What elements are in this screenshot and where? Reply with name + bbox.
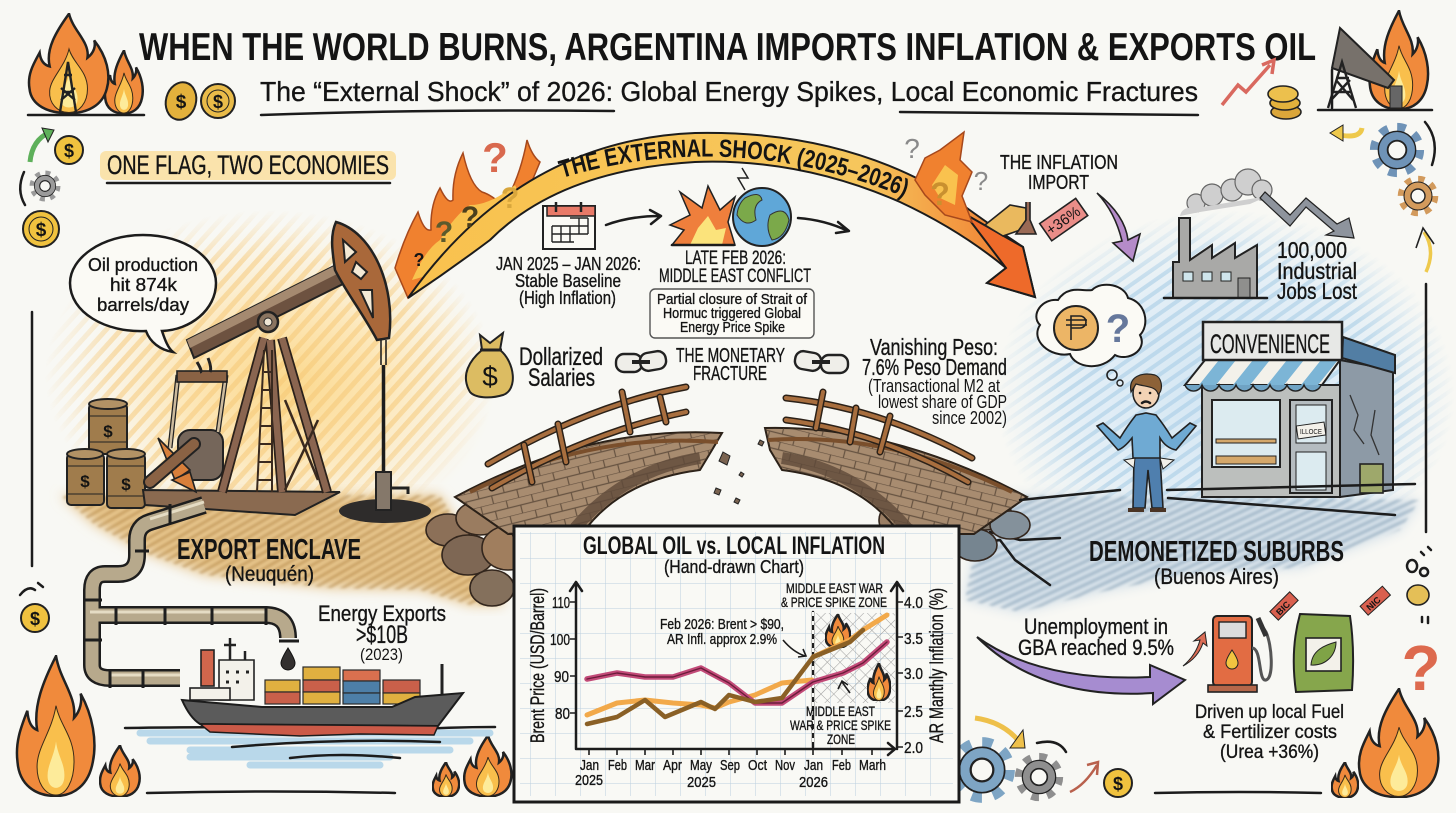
bridge left railing	[488, 387, 686, 488]
callout: strait of hormuz: Energy Price Spike	[680, 320, 785, 336]
chart right tick labels: 4.0	[904, 595, 923, 612]
pump base	[143, 490, 340, 515]
text: stable baseline: JAN 2025 – JAN 2026:	[496, 254, 641, 274]
text: vanishing peso	[862, 334, 1007, 428]
thought bubble: peso coin	[1036, 285, 1145, 386]
text: the monetary fracture: FRACTURE	[693, 363, 767, 385]
speech bubble: oil production: barrels/day	[97, 295, 189, 315]
banner flames right	[915, 132, 972, 222]
ground: cracked suburbs	[965, 495, 1420, 612]
bridge right railing	[786, 392, 972, 482]
chart title: GLOBAL OIL vs. LOCAL INFLATION	[583, 532, 885, 560]
chart month labels: Marh	[859, 758, 886, 774]
chart annotation: war zone lower: ZONE	[827, 731, 855, 747]
arrow: calendar to explosion	[606, 210, 661, 225]
chart month labels: Jan	[580, 758, 599, 774]
chart annotation: february 2026: AR Infl. approx 2.9%	[667, 632, 777, 648]
arc banner: the external shock: ?	[930, 176, 950, 212]
store sign	[1203, 322, 1342, 360]
pump wellhead	[376, 472, 391, 510]
chart right tick labels: 2.5	[904, 704, 923, 721]
subtitle: The “External Shock” of 2026: Global Energy Spikes, Local Economic Fractures	[260, 76, 1198, 107]
text: fuel and fertilizer costs	[1195, 702, 1344, 763]
stat: energy exports: Energy Exports	[318, 601, 446, 626]
stat: industrial jobs lost: Industrial	[1277, 258, 1357, 284]
thought bubble: peso coin: ?	[1106, 307, 1130, 351]
chart axes	[570, 582, 903, 755]
heading: demonetized suburbs: (Buenos Aires)	[1154, 564, 1279, 589]
icon: broken chain left	[616, 350, 667, 372]
text: middle east conflict: MIDDLE EAST CONFLICT	[659, 266, 811, 287]
arc banner: the external shock: ?	[414, 250, 424, 270]
text: the inflation import: THE INFLATION	[1000, 152, 1118, 174]
person with empty pockets	[1097, 374, 1196, 510]
icon: fuel pump: BIC	[1274, 599, 1292, 617]
text: vanishing peso: lowest share of GDP	[878, 392, 1007, 412]
chart month labels: 2026	[799, 775, 828, 791]
text: fuel and fertilizer costs: & Fertilizer costs	[1203, 722, 1337, 743]
text: dollarized salaries	[519, 343, 603, 392]
arrow: small red rising	[1183, 632, 1207, 666]
icon: flames, bottom right	[1155, 689, 1438, 798]
question marks around banner: ?	[482, 134, 508, 181]
icon: broken chain right	[794, 350, 848, 373]
chart panel: global oil vs local inflation	[514, 526, 959, 802]
factory smoke	[1187, 169, 1272, 212]
store window	[1212, 400, 1280, 467]
stat: unemployment: Unemployment in	[1024, 614, 1168, 639]
stat: unemployment: GBA reached 9.5%	[1018, 635, 1174, 660]
text: fuel and fertilizer costs: (Urea +36%)	[1220, 742, 1319, 763]
chart month labels: Feb	[832, 758, 851, 774]
ship hull	[182, 693, 463, 726]
callout: strait of hormuz: Partial closure of Strait of	[657, 292, 808, 308]
pump horsehead	[332, 222, 390, 340]
text: stable baseline	[496, 254, 641, 308]
store door: ILLOCE	[1300, 429, 1322, 436]
heading: Export Enclave: EXPORT ENCLAVE	[177, 534, 361, 566]
chart left tick labels: 110	[552, 595, 570, 612]
person head	[1133, 378, 1159, 408]
blue wash behind suburbs	[1003, 216, 1446, 504]
callout: strait of hormuz	[650, 289, 814, 338]
text: vanishing peso: Vanishing Peso:	[870, 334, 998, 360]
store awning	[1185, 360, 1340, 391]
stat: industrial jobs lost: 100,000	[1277, 237, 1347, 263]
arc banner: the external shock: ?	[501, 182, 519, 215]
pump polished rod	[381, 340, 386, 365]
arrow: inflation import, purple	[1097, 193, 1140, 261]
sidewalk lines	[1020, 484, 1415, 515]
chart annotation: war zone lower: MIDDLE EAST	[806, 703, 875, 719]
text: vanishing peso: since 2002)	[932, 408, 1007, 428]
speech bubble: oil production: hit 874k	[110, 275, 178, 295]
chart left tick labels: 80	[555, 706, 570, 723]
factory falling arrow	[1260, 192, 1354, 238]
chart annotation: war zone lower	[790, 681, 891, 747]
heading: Export Enclave: (Neuquén)	[225, 563, 314, 586]
store side wall	[1340, 360, 1393, 497]
chart line: local inflation (orange)	[587, 615, 887, 715]
heading: demonetized suburbs: DEMONETIZED SUBURBS	[1089, 536, 1344, 568]
text: dollarized salaries: Salaries	[528, 364, 595, 392]
convenience store	[1020, 322, 1415, 515]
text: the monetary fracture: THE MONETARY	[676, 345, 785, 367]
icon: money bag	[466, 333, 513, 397]
flame in war zone, lower	[868, 663, 890, 701]
arrow: globe onward	[798, 218, 849, 233]
chart month labels: 2025	[687, 775, 716, 791]
broken bridge	[426, 387, 1030, 606]
text: the inflation import	[1000, 152, 1118, 194]
stat: energy exports	[318, 601, 446, 664]
text: middle east conflict: LATE FEB 2026:	[685, 248, 786, 269]
pipeline	[84, 502, 299, 688]
stat: industrial jobs lost: Jobs Lost	[1277, 278, 1357, 304]
icon: flames, bottom left	[17, 656, 395, 797]
right border decoration: gears and arrows	[1330, 122, 1441, 704]
stat: energy exports: >$10B	[356, 621, 408, 649]
icon: rising arrow with coin stack, top right	[1222, 60, 1301, 119]
stat: unemployment	[1018, 614, 1174, 660]
callout: strait of hormuz: Hormuc triggered Global	[663, 306, 801, 322]
chart month labels: Apr	[663, 758, 682, 774]
left border decoration: arrows, coins and gear: $	[64, 141, 74, 161]
flame in war zone, upper	[826, 614, 850, 648]
person torso and arms	[1097, 413, 1196, 458]
icon: +36% price tag: +36%	[1043, 203, 1084, 239]
text: the inflation import: IMPORT	[1028, 172, 1089, 194]
chart left tick labels: 100	[550, 632, 570, 649]
right border decoration: gears and arrows: ?	[1401, 632, 1441, 704]
stat: industrial jobs lost	[1277, 237, 1357, 304]
icon: gold coins, top left: $	[176, 92, 187, 113]
icon: gold coins, top left: $	[213, 92, 223, 112]
chart right tick labels: 3.5	[904, 631, 923, 648]
chart annotation: february 2026	[660, 617, 806, 657]
icon: gold coins, top left	[162, 79, 235, 123]
pump samson post	[222, 338, 327, 492]
text: vanishing peso: 7.6% Peso Demand	[862, 354, 1007, 380]
icon: calendar	[543, 202, 595, 249]
chart line: brent (crimson)	[587, 642, 887, 703]
banner text	[562, 157, 912, 200]
chart subtitle: (Hand-drawn Chart)	[664, 557, 804, 577]
heading: demonetized suburbs	[1089, 536, 1344, 589]
chart month labels: Jan	[804, 758, 823, 774]
pump pitman arms	[170, 375, 226, 448]
chart annotation: war zone upper: & PRICE SPIKE ZONE	[781, 594, 887, 610]
ship bridge	[219, 660, 254, 700]
chart right tick labels: 2.0	[904, 740, 923, 757]
oil barrels: $	[103, 422, 113, 441]
text: the monetary fracture	[676, 345, 785, 385]
chart annotation: war zone upper	[781, 580, 887, 610]
chart annotation: war zone lower: WAR & PRICE SPIKE	[790, 717, 891, 733]
chart month labels	[575, 758, 886, 791]
speech bubble: oil production	[70, 235, 216, 352]
icon: burning oil derrick, top left	[28, 14, 144, 115]
text: fuel and fertilizer costs: Driven up local Fuel	[1195, 702, 1344, 723]
arc banner: the external shock: ?	[974, 166, 988, 196]
oil barrels: $	[121, 475, 131, 494]
store front wall	[1202, 385, 1340, 497]
icon: price tag and flask	[985, 202, 1036, 236]
store sign: CONVENIENCE	[1210, 329, 1330, 359]
text: stable baseline: (High Inflation)	[519, 288, 616, 308]
icon: fertilizer bag	[1294, 586, 1390, 692]
ship containers	[265, 667, 420, 704]
oil barrels	[67, 399, 145, 508]
chart left tick labels	[550, 595, 570, 723]
text: middle east conflict	[659, 248, 811, 287]
oil pump jack	[143, 222, 431, 523]
bridge rock piles	[426, 488, 1030, 606]
chart left tick labels: 90	[554, 669, 569, 686]
icon: explosion and globe	[670, 168, 791, 246]
chart month labels: May	[690, 758, 713, 774]
stat: energy exports: (2023)	[360, 645, 403, 664]
arc banner: the external shock: ?	[904, 133, 920, 164]
chart month labels: 2025	[575, 773, 603, 789]
icon: money bag: $	[482, 361, 498, 392]
text: stable baseline: Stable Baseline	[515, 271, 621, 291]
chart line: brown trend	[587, 630, 863, 724]
water	[125, 727, 495, 765]
left border decoration: arrows, coins and gear	[20, 128, 83, 632]
icon: fuel pump	[1208, 592, 1298, 692]
icon: gears and coin, bottom right of chart: $	[1113, 774, 1123, 794]
chart month labels: Mar	[635, 758, 655, 774]
pump walking beam	[187, 263, 347, 358]
pump crank and counterweight	[150, 430, 223, 492]
arc banner: the external shock	[394, 130, 1036, 300]
banner flames left	[395, 140, 540, 298]
icon: fertilizer bag: NIC	[1364, 594, 1383, 612]
bridge right span	[765, 428, 1027, 534]
chart annotation: war zone upper: MIDDLE EAST WAR	[786, 580, 883, 596]
person pockets	[1124, 458, 1174, 469]
chart right tick labels: 3.0	[904, 666, 923, 683]
cargo ship	[182, 638, 463, 736]
oil drip	[281, 648, 295, 670]
chart month labels: Feb	[608, 758, 627, 774]
icon: factory with smoke	[1164, 169, 1354, 298]
chart axis label: brent: Brent Price (USD/Barrel)	[528, 588, 549, 743]
oil barrels: $	[80, 472, 90, 491]
arrow: unemployment, purple	[977, 637, 1185, 704]
chart annotation: february 2026: Feb 2026: Brent > $90,	[660, 617, 784, 633]
store trash can	[1360, 464, 1383, 493]
speech bubble: oil production: Oil production	[88, 255, 198, 275]
person legs	[1133, 457, 1163, 508]
chart month labels: Oct	[748, 758, 767, 774]
chart axis label: inflation: AR Manthly Inflation (%)	[927, 588, 948, 743]
arc banner: the external shock: ?	[461, 201, 479, 234]
yellow wash behind oil field	[52, 216, 488, 500]
heading: Export Enclave	[177, 534, 361, 586]
chart month labels: Sep	[720, 758, 740, 774]
banner body	[408, 133, 1035, 298]
icon: flames, bottom centre left	[433, 735, 511, 797]
text: dollarized salaries: Dollarized	[519, 343, 603, 371]
left border decoration: arrows, coins and gear: $	[30, 609, 40, 629]
store door	[1290, 400, 1332, 493]
bridge left span	[455, 432, 722, 534]
factory building	[1173, 218, 1257, 298]
war zone hatching	[813, 613, 895, 703]
bridge debris	[714, 440, 764, 504]
icon: pump jack with flames, top right	[1318, 11, 1432, 110]
arc banner: the external shock: THE EXTERNAL SHOCK (2025–2026)	[558, 139, 908, 200]
arc banner: the external shock: ?	[435, 216, 453, 249]
text: vanishing peso: (Transactional M2 at	[868, 376, 1000, 396]
ground: Neuquén oil field	[60, 495, 505, 605]
chart month labels: Nov	[775, 758, 796, 774]
left border decoration: arrows, coins and gear: $	[36, 220, 47, 241]
heading: One Flag, Two Economies: ONE FLAG, TWO ECONOMIES	[107, 150, 389, 180]
icon: gears and coin, bottom right of chart	[955, 718, 1132, 797]
heading: One Flag, Two Economies	[100, 150, 396, 183]
oil puddle	[339, 499, 431, 523]
chart right tick labels	[904, 595, 923, 757]
store roof	[1342, 337, 1395, 373]
